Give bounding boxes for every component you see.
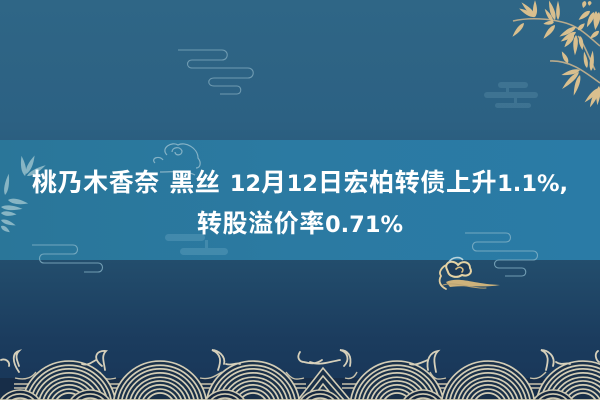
title: 桃乃木香奈 黑丝 12月12日宏柏转债上升1.1%, [32,168,568,197]
faint cloud in band [165,234,228,255]
mist lines in band [32,233,538,276]
water behind the waves [0,378,600,400]
bamboo branches gold [511,0,600,108]
faint cloud top right [484,82,538,108]
waves [0,361,600,400]
pale cloud in band [154,144,200,175]
gold cloud top edge over band [449,258,463,262]
teal title band [0,140,600,260]
mist line top [178,50,253,94]
title: 转股溢价率0.71% [197,209,403,238]
wave crests [1,350,599,372]
pale bamboo in band [0,155,47,234]
gold cloud [440,262,500,289]
title [32,168,568,238]
